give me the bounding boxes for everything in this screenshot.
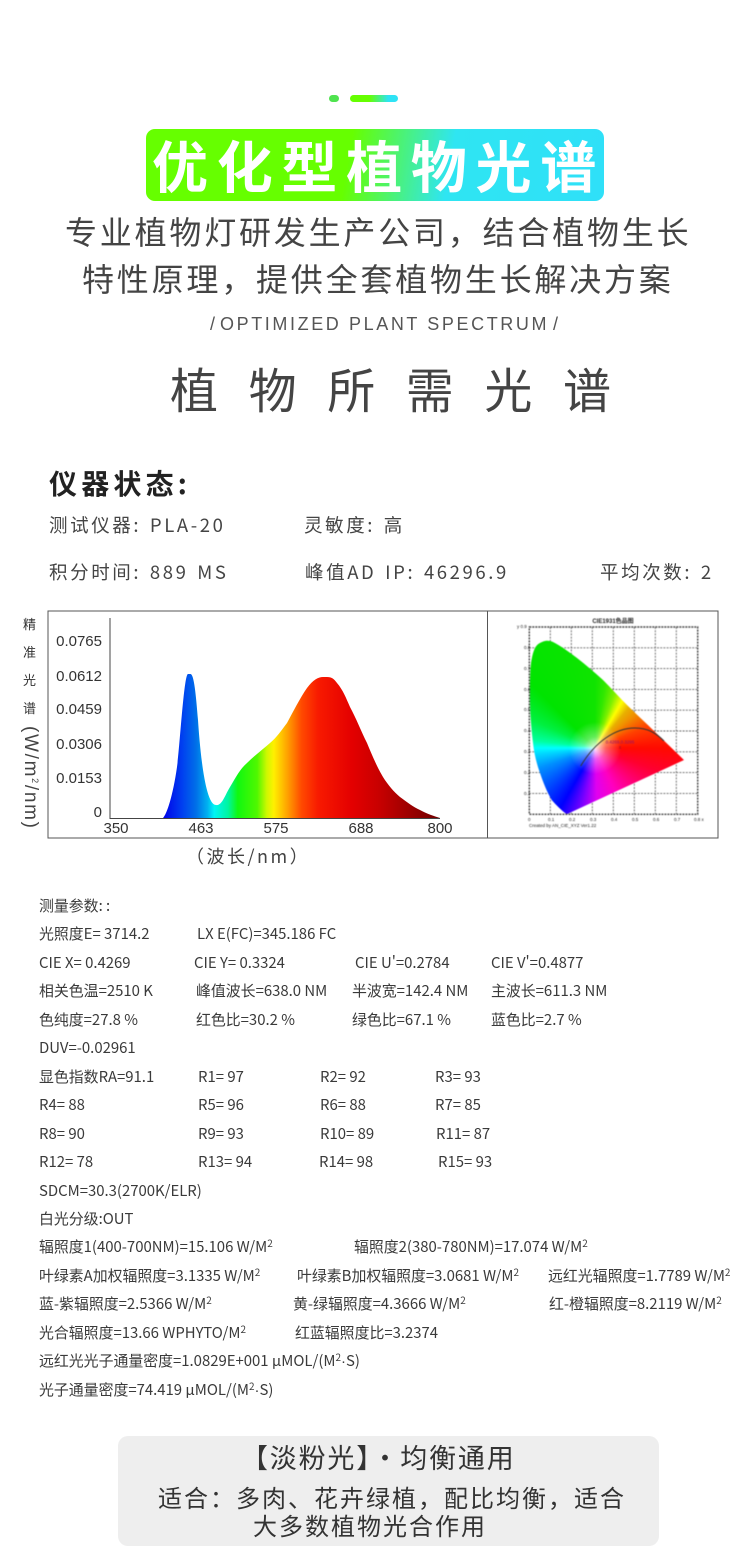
measurement parameters: R4= 88: [39, 1094, 85, 1115]
instrument name: 测试仪器: PLA-20: [49, 512, 226, 538]
measurement parameters: R1= 97: [198, 1066, 244, 1087]
plot border: [529, 627, 698, 814]
measurement parameters: CIE U'=0.2784: [355, 952, 450, 973]
measurement parameters: R14= 98: [319, 1151, 373, 1172]
y axis label: (W/m 2 /nm): [20, 726, 41, 830]
x tick labels: 350: [103, 820, 129, 837]
chart axis labels: [517, 624, 705, 828]
y axis label: 光: [23, 670, 36, 689]
measurement parameters: 白光分级:OUT: [39, 1208, 133, 1229]
measurement parameters: 辐照度1(400-700NM)=15.106 W/M2: [39, 1235, 273, 1257]
measurement parameters: 光合辐照度=13.66 WPHYTO/M2: [39, 1321, 246, 1343]
measurement parameters: R15= 93: [438, 1151, 492, 1172]
section heading: 植物所需光谱: [170, 352, 642, 422]
chart axis labels: 0.6: [653, 817, 660, 822]
measurement parameters: 显色指数RA=91.1: [39, 1066, 154, 1087]
chart axis labels: 0.4: [524, 728, 531, 733]
average count: 平均次数: 2: [600, 559, 714, 585]
x tick labels: 463: [188, 820, 214, 837]
sample point marker: x: [619, 745, 622, 751]
chart axis labels: 0.4: [611, 817, 618, 822]
title banner: 优化型植物光谱: [152, 124, 605, 205]
measurement parameters: R13= 94: [198, 1151, 252, 1172]
chart axis labels: 0.2: [524, 770, 531, 775]
measurement parameters: CIE X= 0.4269: [39, 952, 131, 973]
coordinate label: 0.4269,0.3295: [606, 740, 635, 744]
y axis label: 准: [23, 642, 36, 661]
y axis label: [20, 614, 41, 830]
measurement parameters: 光子通量密度=74.419 µMOL/(M2·S): [39, 1378, 273, 1400]
measurement parameters: 辐照度2(380-780NM)=17.074 W/M2: [354, 1235, 588, 1257]
measurement parameters: 相关色温=2510 K: [39, 980, 153, 1001]
spectrum chart panel: [48, 610, 718, 838]
english subtitle: OPTIMIZED PLANT SPECTRUM: [220, 314, 549, 334]
x tick labels: 688: [348, 820, 374, 837]
chart axis labels: 0.2: [569, 817, 576, 822]
box description: 适合：多肉、花卉绿植，配比均衡，适合: [158, 1479, 626, 1514]
recommendation box: [118, 1436, 659, 1546]
measurement parameters: R2= 92: [320, 1066, 366, 1087]
chart axis labels: 0.7: [524, 666, 531, 671]
integration time: 积分时间: 889 MS: [49, 559, 228, 585]
measurement parameters: CIE V'=0.4877: [491, 952, 583, 973]
decorative pill accents: [329, 95, 398, 102]
measurement parameters: R11= 87: [436, 1123, 490, 1144]
measurement parameters: 远红光辐照度=1.7789 W/M2: [548, 1264, 730, 1286]
measurement parameters: R12= 78: [39, 1151, 93, 1172]
axes: [110, 618, 440, 818]
measurement parameters: 绿色比=67.1 %: [352, 1009, 451, 1030]
chart axis labels: 0.3: [590, 817, 597, 822]
y axis label: 精: [23, 614, 36, 633]
chart grid: [529, 626, 698, 814]
planckian locus: [581, 728, 664, 766]
chart axis labels: y 0.9: [517, 624, 527, 629]
box description line 2: 大多数植物光合作用: [253, 1507, 487, 1542]
chart axis labels: 0: [528, 817, 531, 822]
measurement parameters: R6= 88: [320, 1094, 366, 1115]
peak AD: 峰值AD IP: 46296.9: [305, 559, 509, 585]
spectrum curve: [163, 674, 440, 818]
x tick labels: 575: [263, 820, 289, 837]
subtitle: 特性原理，提供全套植物生长解决方案: [82, 255, 674, 301]
measurement parameters: 光照度E= 3714.2: [39, 923, 150, 944]
chart axis labels: 0.8 x: [694, 817, 705, 822]
y tick labels: 0.0306: [56, 736, 102, 753]
subtitle: [65, 208, 691, 301]
measurement parameters: 远红光光子通量密度=1.0829E+001 µMOL/(M2·S): [39, 1349, 360, 1371]
y tick labels: 0: [94, 804, 102, 821]
measurement parameters: 半波宽=142.4 NM: [352, 980, 468, 1001]
measurement parameters: 蓝色比=2.7 %: [491, 1009, 582, 1030]
measurement parameters: R10= 89: [320, 1123, 374, 1144]
box heading: 【淡粉光】·均衡通用: [241, 1437, 516, 1476]
sensitivity: 灵敏度: 高: [304, 512, 405, 538]
CIE chromaticity diagram: [516, 616, 705, 829]
chart title: CIE1931色品图: [592, 617, 634, 625]
x axis label: （波长/nm）: [186, 843, 310, 869]
measurement parameters: R7= 85: [435, 1094, 481, 1115]
chart axis labels: 0.1: [548, 817, 555, 822]
chromaticity gamut: [529, 640, 684, 814]
measurement parameters: 测量参数: :: [39, 895, 110, 916]
measurement parameters: 叶绿素B加权辐照度=3.0681 W/M2: [297, 1264, 519, 1286]
y tick labels: 0.0612: [56, 668, 102, 685]
chart frame: [48, 611, 718, 838]
y tick labels: 0.0459: [56, 701, 102, 718]
measurement parameters: R8= 90: [39, 1123, 85, 1144]
panel divider: [486, 611, 488, 838]
measurement parameters: 红色比=30.2 %: [196, 1009, 295, 1030]
measurement parameters: 红蓝辐照度比=3.2374: [295, 1322, 438, 1343]
measurement parameters: 峰值波长=638.0 NM: [196, 980, 327, 1001]
measurement parameters: 红-橙辐照度=8.2119 W/M2: [549, 1292, 722, 1314]
chart axis labels: 0.3: [524, 749, 531, 754]
y tick labels: [56, 633, 102, 821]
chart axis labels: 0.8: [524, 645, 531, 650]
y tick labels: 0.0153: [56, 770, 102, 787]
subtitle: 专业植物灯研发生产公司，结合植物生长: [65, 208, 691, 254]
english subtitle: /: [553, 314, 558, 334]
chart axis labels: 0.5: [524, 707, 531, 712]
measurement parameters: R3= 93: [435, 1066, 481, 1087]
measurement parameters: R9= 93: [198, 1123, 244, 1144]
chart axis labels: 0.1: [524, 791, 531, 796]
measurement parameters: [39, 895, 730, 1400]
chart axis labels: 0.5: [632, 817, 639, 822]
measurement parameters: DUV=-0.02961: [39, 1037, 136, 1058]
measurement parameters: SDCM=30.3(2700K/ELR): [39, 1180, 202, 1201]
x tick labels: [103, 820, 453, 837]
x tick labels: 800: [427, 820, 453, 837]
measurement parameters: LX E(FC)=345.186 FC: [197, 923, 336, 944]
english subtitle: /: [210, 314, 215, 334]
y axis label: 谱: [23, 698, 36, 717]
measurement parameters: 主波长=611.3 NM: [491, 980, 607, 1001]
chart axis labels: 0.6: [524, 687, 531, 692]
measurement parameters: CIE Y= 0.3324: [194, 952, 285, 973]
measurement parameters: 黄-绿辐照度=4.3666 W/M2: [293, 1292, 466, 1314]
chromaticity plot: [516, 616, 705, 829]
chart axis labels: 0.7: [674, 817, 681, 822]
measurement parameters: 蓝-紫辐照度=2.5366 W/M2: [39, 1292, 212, 1314]
y tick labels: 0.0765: [56, 633, 102, 650]
instrument status: [49, 463, 714, 585]
measurement parameters: 色纯度=27.8 %: [39, 1009, 138, 1030]
instrument heading: 仪器状态:: [49, 463, 191, 503]
measurement parameters: R5= 96: [198, 1094, 244, 1115]
chart axis labels: Created by AN_CIE_XYZ Ver1.22: [529, 823, 597, 828]
measurement parameters: 叶绿素A加权辐照度=3.1335 W/M2: [39, 1264, 260, 1286]
